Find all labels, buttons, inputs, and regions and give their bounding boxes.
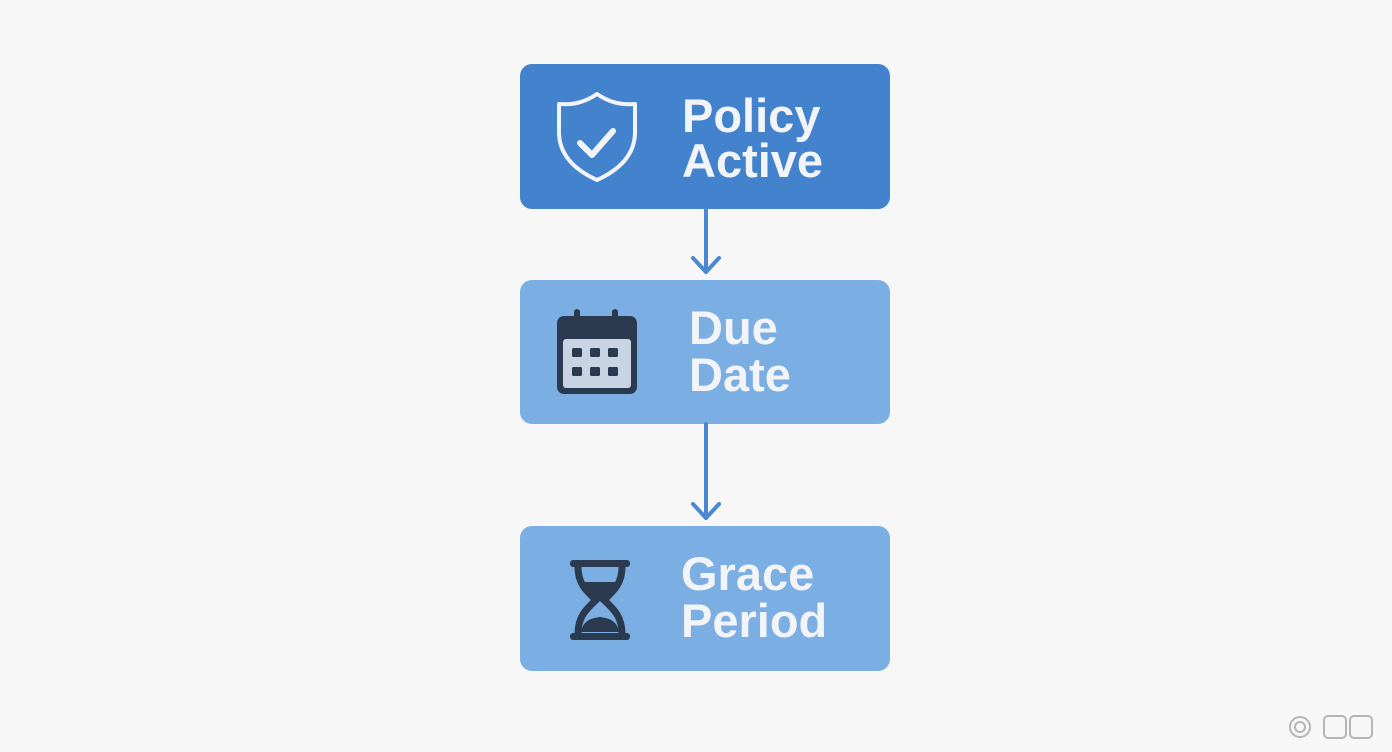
panel: due date [520,280,890,424]
text: policy active: Active [682,134,823,187]
panel: grace period [520,526,890,671]
text: due date [689,301,791,401]
arrow 2 [693,424,719,518]
text: grace period: Period [681,594,827,647]
text: due date: Date [689,348,791,401]
text: due date: Due [689,301,778,354]
text: grace period: Grace [681,547,814,600]
icon: shield check [559,94,635,180]
panel: policy active [520,64,890,209]
text: grace period [681,547,827,647]
text: policy active [682,89,823,187]
icon: hourglass [570,560,630,640]
icon: license badges [1290,716,1372,738]
text: policy active: Policy [682,89,820,142]
icon: calendar [557,309,637,394]
arrow 1 [693,209,719,272]
